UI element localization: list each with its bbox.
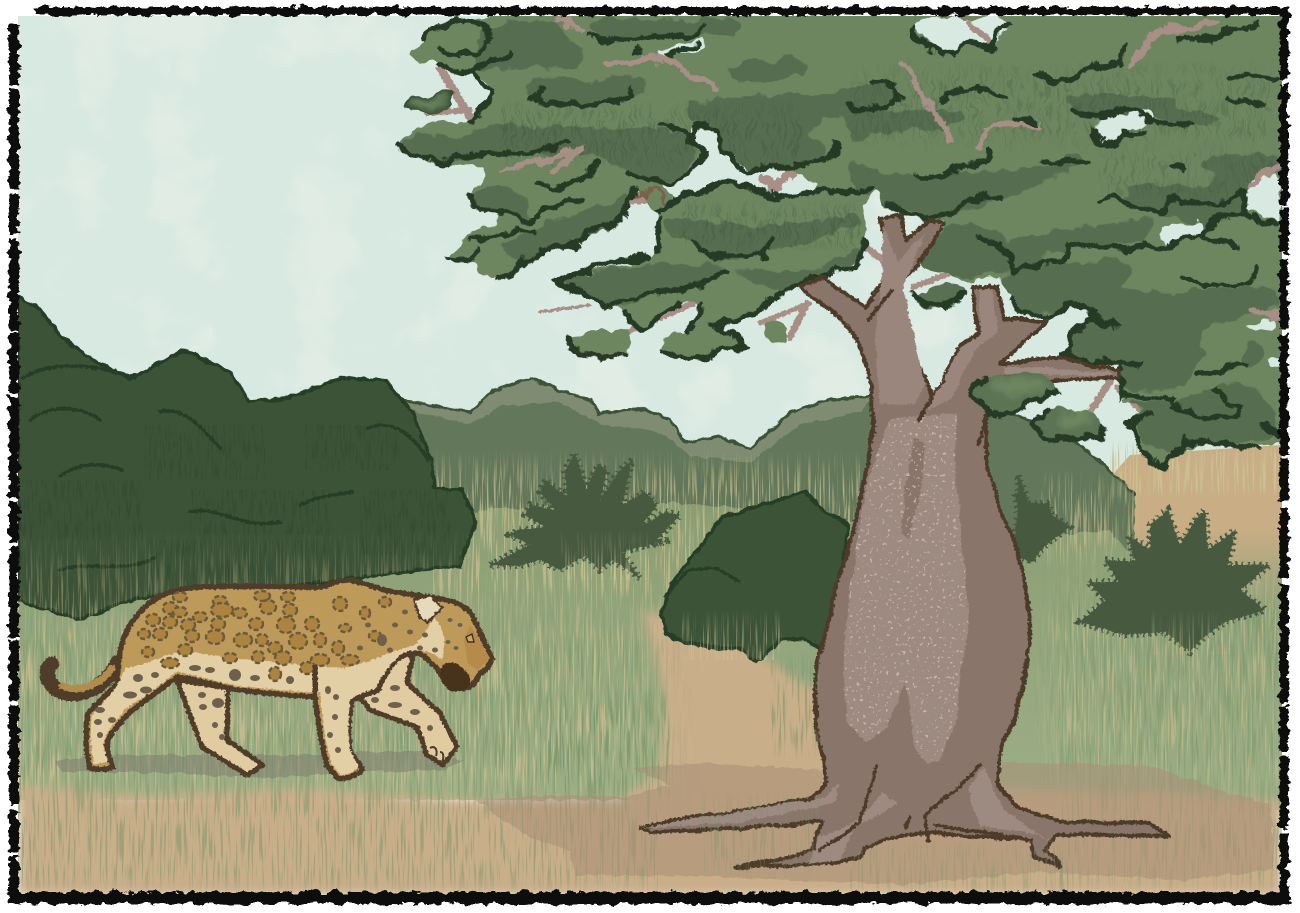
branches behind the foliage — [427, 68, 1140, 412]
fern bush: right — [1080, 510, 1270, 652]
leopard rosettes — [138, 591, 391, 681]
leopard near foreleg line — [312, 665, 318, 697]
leopard chin — [440, 663, 470, 692]
trunk light bark areas — [640, 225, 1110, 865]
dark bush: left — [18, 296, 478, 625]
grass over centre bush base — [682, 610, 782, 660]
tan grass in the background on the right — [1110, 442, 1282, 608]
tan ground — [18, 610, 1282, 896]
tree shadow on the ground — [475, 762, 1272, 885]
foliage clusters in front of the branches — [967, 370, 1107, 440]
leopard ear — [414, 595, 442, 622]
foliage contour strokes — [397, 20, 1278, 467]
fern bush: behind the trunk — [1012, 474, 1070, 562]
far bushes — [403, 376, 1136, 560]
sky gaps in the foliage — [648, 18, 1280, 372]
grass over bush base — [18, 539, 468, 620]
small outlying foliage — [405, 93, 965, 358]
trunk bark speckle — [840, 415, 975, 765]
leopard — [47, 580, 492, 778]
leopard muzzle — [464, 625, 490, 670]
right meadow blades — [1042, 575, 1282, 793]
leopard far hind leg — [177, 680, 263, 775]
leopard cream underside — [91, 618, 444, 774]
grass tufts over the ground — [540, 650, 1070, 895]
leopard solid spots — [94, 610, 462, 753]
fern bush: centre — [490, 453, 680, 578]
dark foliage patches — [397, 20, 1280, 457]
leopard paw claws — [430, 747, 443, 762]
leopard body — [86, 580, 492, 778]
tree canopy — [397, 0, 1300, 467]
leopard tail — [47, 662, 118, 694]
left meadow blades — [18, 604, 685, 806]
canopy silhouette — [397, 0, 1300, 467]
grass over fern bases — [560, 530, 1230, 655]
grassland — [18, 450, 1282, 810]
bush contour strokes — [22, 366, 428, 570]
foliage hatch texture — [500, 104, 802, 165]
grass texture — [18, 560, 1282, 895]
bush shading — [18, 425, 450, 580]
leopard far front leg — [358, 655, 457, 765]
branches among the foliage — [503, 17, 1278, 317]
centre bush contour — [664, 568, 740, 597]
dark bush: centre — [661, 492, 850, 662]
sky — [18, 16, 1280, 474]
trunk crease lines — [819, 290, 1032, 850]
leopard eye — [466, 634, 474, 642]
leopard shadow — [55, 750, 462, 778]
trunk silhouette — [640, 215, 1170, 867]
baobab trunk and branches — [640, 215, 1170, 867]
